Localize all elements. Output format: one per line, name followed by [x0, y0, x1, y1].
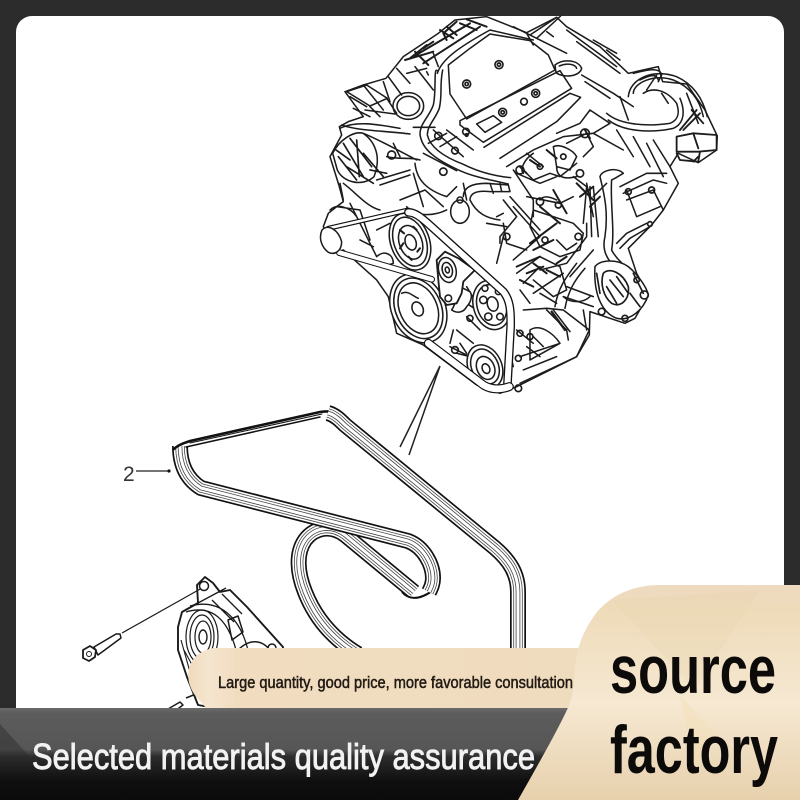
- consultation text: Large quantity, good price, more favorable consultation: [218, 674, 573, 692]
- pulley: lower left: [379, 264, 458, 352]
- band: quality assurance: [0, 708, 570, 800]
- band: consultation note: [188, 648, 600, 708]
- lower right block: [520, 308, 589, 383]
- vertical hose: [600, 170, 625, 268]
- thermostat housing: [595, 261, 648, 319]
- badge highlight: [680, 695, 715, 770]
- pulley: bottom: [460, 339, 510, 394]
- centre injectors: [507, 110, 610, 183]
- mounting bolt: [83, 582, 208, 661]
- belt: flat twisted top run: [174, 411, 336, 449]
- coolant tube: [420, 70, 511, 184]
- pulley: right idler: [467, 276, 516, 334]
- engine drive belt: [328, 210, 511, 389]
- quality assurance text: Selected materials quality assurance: [32, 736, 535, 777]
- belt: loop closing edge: [402, 591, 432, 598]
- valve cover: [448, 34, 555, 119]
- part number label 2: 2: [123, 463, 135, 486]
- lower bolt: [168, 694, 196, 711]
- pointer lines from engine to belt: [400, 366, 440, 455]
- belt: front ribbed run with end loop: [180, 446, 433, 592]
- top ridge: [513, 16, 633, 107]
- band left dark corner: [0, 724, 30, 757]
- tensioner assembly and bolt: [83, 577, 283, 720]
- pulley: crank: [382, 207, 438, 276]
- alternator nose: [320, 227, 342, 253]
- badge shading: [612, 590, 760, 690]
- belt: left ribbed loop behind: [299, 529, 414, 654]
- part number label 2: [123, 463, 171, 486]
- top right hoses: [607, 74, 707, 131]
- engine line drawing: [320, 16, 717, 394]
- nose area left: [330, 183, 393, 267]
- left manifold: [340, 85, 410, 134]
- connector and hose: [463, 183, 510, 220]
- belt: right ribbed run: [328, 413, 518, 652]
- tensioner: [436, 252, 475, 312]
- badge: source factory: [518, 585, 800, 800]
- lower centre pipes: [540, 223, 593, 308]
